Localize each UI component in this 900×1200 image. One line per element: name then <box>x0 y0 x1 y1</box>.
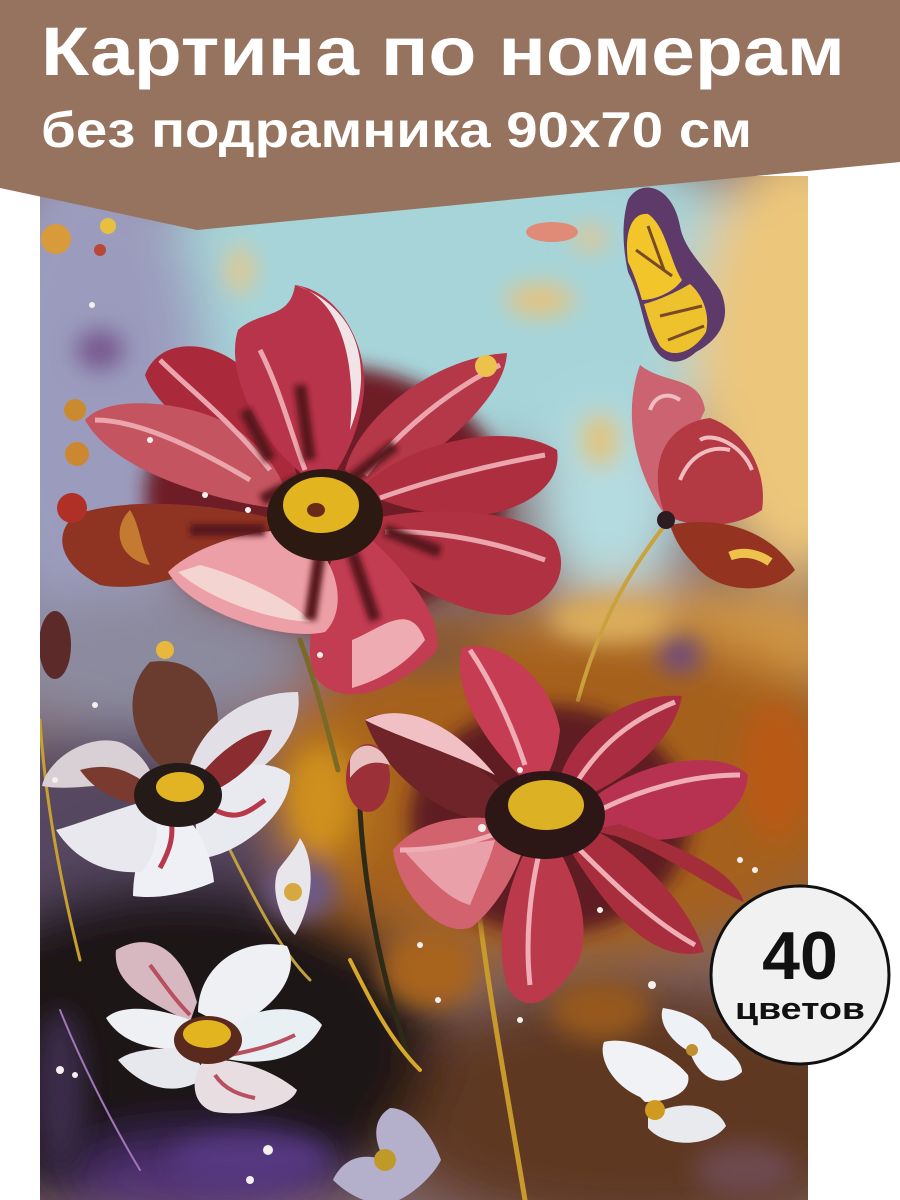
subtitle: без подрамника 90х70 см <box>41 102 752 158</box>
soft shadow behind petals <box>410 705 690 935</box>
flower: white middle small <box>275 838 311 935</box>
badge: 40 colours: 40 <box>762 918 838 994</box>
stems <box>40 525 665 1200</box>
soft shadow behind petals <box>145 365 505 625</box>
paint splatter dots <box>41 218 758 1184</box>
flower: bud <box>39 611 390 812</box>
flower: white small right <box>603 1008 742 1143</box>
badge: 40 colours <box>711 886 889 1064</box>
badge: 40 colours: цветов <box>735 991 865 1026</box>
flower centre <box>267 469 383 561</box>
title: Картина по номерам <box>41 13 845 90</box>
flower: top right partial <box>632 365 795 588</box>
flower: large red top <box>62 285 561 694</box>
painting: flowers and butterfly <box>40 176 808 1200</box>
painted background <box>40 176 808 1200</box>
banner <box>0 0 900 230</box>
flower: grey-blue bottom <box>333 1108 441 1200</box>
petal highlights <box>95 350 545 560</box>
butterfly <box>624 187 725 362</box>
flower: white lower left <box>106 942 322 1113</box>
flower: large red bottom <box>365 646 748 1003</box>
flower: brown and white left <box>42 661 299 897</box>
